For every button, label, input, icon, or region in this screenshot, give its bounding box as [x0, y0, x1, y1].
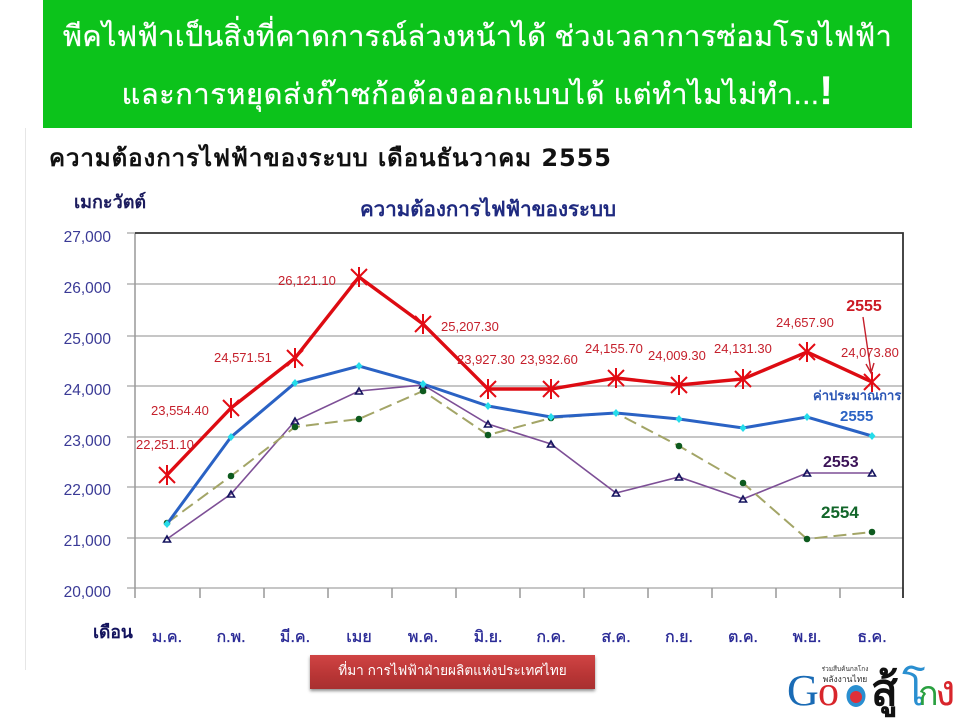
- y axis labels: 25,000: [64, 331, 111, 348]
- y axis labels: 22,000: [64, 482, 111, 499]
- logo wordmark Goo: o: [818, 669, 839, 715]
- logo wordmark Thai: ก: [918, 675, 939, 713]
- y axis labels: 21,000: [64, 533, 111, 550]
- x axis labels: ก.ย.: [665, 629, 693, 646]
- logo: [787, 665, 956, 718]
- series 2555 red: [159, 267, 880, 485]
- data labels 2555: 24,009.30: [648, 348, 706, 363]
- data labels 2555: 26,121.10: [278, 273, 336, 288]
- grid and axes: [127, 233, 903, 598]
- x axis labels: ส.ค.: [601, 629, 631, 646]
- x axis labels: เมย: [346, 629, 372, 646]
- annotation 2555 with arrow: 2555: [846, 298, 882, 315]
- x axis labels: มิ.ย.: [474, 629, 502, 646]
- source label: [310, 655, 595, 689]
- series labels: [813, 388, 901, 522]
- x axis labels: พ.ค.: [408, 629, 438, 646]
- logo wordmark Thai: โ: [902, 665, 926, 715]
- y axis labels: 23,000: [64, 433, 111, 450]
- x axis labels: [152, 628, 887, 646]
- y axis labels: 20,000: [64, 584, 111, 601]
- series labels: ค่าประมาณการ: [813, 388, 901, 403]
- x axis labels: ก.ค.: [536, 629, 566, 646]
- x axis labels: ก.พ.: [216, 629, 246, 646]
- banner heading: และการหยุดส่งก๊าซก้อต้องออกแบบได้ แต่ทำไมไม่ทำ...!: [122, 69, 833, 113]
- data labels 2555: 24,571.51: [214, 350, 272, 365]
- logo tagline: ร่วมสืบค้นกลโกง: [822, 665, 868, 673]
- chart heading: ความต้องการไฟฟ้าของระบบ เดือนธันวาคม 2555: [49, 144, 612, 172]
- series labels: 2554: [821, 503, 859, 522]
- data labels 2555: 23,927.30: [457, 352, 515, 367]
- series 2554 green dashed: [164, 388, 875, 542]
- source label: ที่มา การไฟฟ้าฝ่ายผลิตแห่งประเทศไทย: [338, 663, 567, 678]
- logo tagline: พลังงานไทย: [823, 674, 867, 684]
- chart titles: [74, 191, 616, 221]
- series 2553 purple: [164, 382, 876, 542]
- x axis labels: ต.ค.: [728, 629, 758, 646]
- y axis labels: 27,000: [64, 229, 111, 246]
- data labels 2555: 24,073.80: [841, 345, 899, 360]
- logo icon: [846, 685, 866, 707]
- data labels 2555: 22,251.10: [136, 437, 194, 452]
- banner heading: พีคไฟฟ้าเป็นสิ่งที่คาดการณ์ล่วงหน้าได้ ช่วงเวลาการซ่อมโรงไฟฟ้า: [63, 21, 892, 53]
- left page edge line: [25, 128, 26, 670]
- logo tagline: [822, 665, 868, 684]
- data labels 2555: 24,131.30: [714, 341, 772, 356]
- x axis title: เดือน: [93, 622, 133, 642]
- y axis labels: 26,000: [64, 280, 111, 297]
- series labels: 2553: [823, 454, 859, 471]
- logo wordmark Thai: ง: [935, 667, 956, 714]
- chart titles: ความต้องการไฟฟ้าของระบบ: [360, 197, 616, 221]
- y axis labels: [64, 229, 111, 601]
- x axis labels: มี.ค.: [280, 628, 310, 646]
- data labels 2555: 24,155.70: [585, 341, 643, 356]
- series estimate 2555 blue: [164, 362, 876, 528]
- y axis labels: 24,000: [64, 382, 111, 399]
- x axis labels: ม.ค.: [152, 629, 182, 646]
- logo wordmark Thai: สู้: [871, 666, 898, 717]
- series labels: 2555: [840, 408, 873, 425]
- data labels 2555: [136, 273, 899, 452]
- logo wordmark Thai: [871, 665, 956, 717]
- x axis labels: ธ.ค.: [857, 629, 887, 646]
- data labels 2555: 23,932.60: [520, 352, 578, 367]
- x axis labels: พ.ย.: [793, 629, 821, 646]
- data labels 2555: 24,657.90: [776, 315, 834, 330]
- annotation 2555 with arrow: [846, 298, 882, 373]
- logo wordmark Goo: [787, 666, 839, 715]
- data labels 2555: 25,207.30: [441, 319, 499, 334]
- data labels 2555: 23,554.40: [151, 403, 209, 418]
- banner heading: [43, 0, 912, 128]
- logo wordmark Goo: G: [787, 666, 819, 715]
- chart titles: เมกะวัตต์: [74, 191, 146, 212]
